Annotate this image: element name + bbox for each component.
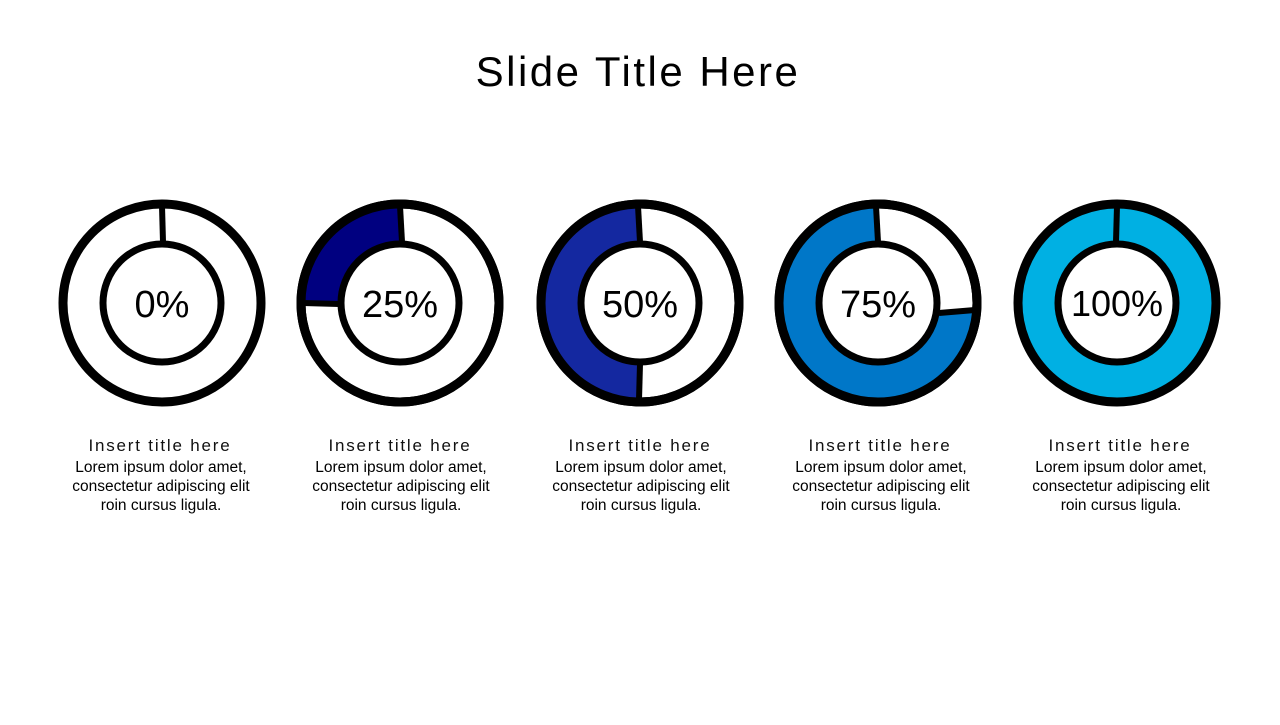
heading: Insert title here — [808, 436, 952, 455]
title: Slide Title Here — [476, 48, 800, 95]
donut 100% — [1018, 204, 1216, 402]
text block: consectetur adipiscing elit — [312, 478, 490, 495]
panel: 75% — [779, 204, 977, 514]
donut 50% — [541, 204, 739, 402]
donut 75%: 75% — [840, 284, 916, 326]
heading: Insert title here — [1048, 436, 1192, 455]
panel: 50% — [541, 204, 739, 514]
donut 0% — [63, 204, 261, 402]
text block: roin cursus ligula. — [101, 497, 221, 514]
heading: Insert title here — [568, 436, 712, 455]
donut 25% — [301, 204, 499, 402]
text block: roin cursus ligula. — [341, 497, 461, 514]
donut 50%: 50% — [602, 284, 678, 326]
text block: roin cursus ligula. — [1061, 497, 1181, 514]
panel: 100% — [1018, 204, 1216, 514]
text block: roin cursus ligula. — [581, 497, 701, 514]
text block: Lorem ipsum dolor amet, — [315, 459, 487, 476]
donut 25%: 25% — [362, 284, 438, 326]
heading: Insert title here — [88, 436, 232, 455]
text block: consectetur adipiscing elit — [72, 478, 250, 495]
text block: Lorem ipsum dolor amet, — [555, 459, 727, 476]
text block: roin cursus ligula. — [821, 497, 941, 514]
donut 75% — [779, 204, 977, 402]
heading: Insert title here — [328, 436, 472, 455]
text block: consectetur adipiscing elit — [552, 478, 730, 495]
panel: 0% — [63, 204, 261, 514]
text block: consectetur adipiscing elit — [1032, 478, 1210, 495]
text block: Lorem ipsum dolor amet, — [1035, 459, 1207, 476]
donut 0%: 0% — [135, 284, 189, 326]
donut 100%: 100% — [1071, 283, 1163, 324]
text block: consectetur adipiscing elit — [792, 478, 970, 495]
panel: 25% — [301, 204, 499, 514]
text block: Lorem ipsum dolor amet, — [75, 459, 247, 476]
text block: Lorem ipsum dolor amet, — [795, 459, 967, 476]
